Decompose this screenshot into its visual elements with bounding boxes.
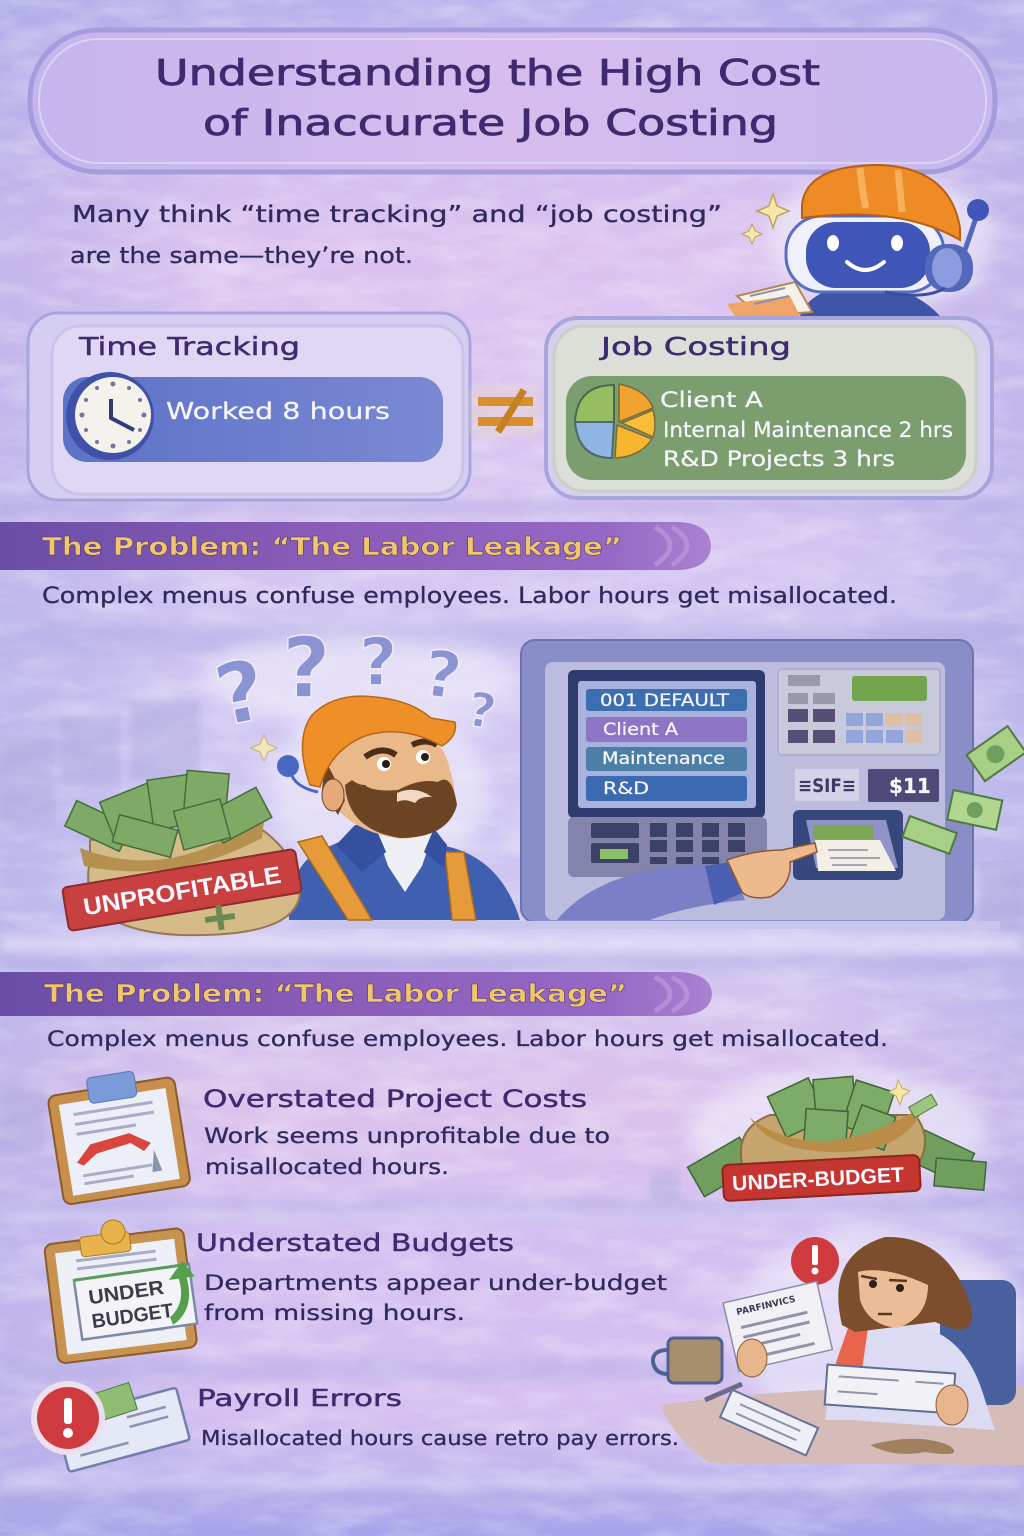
icon: pie chart (575, 384, 655, 458)
intro text (70, 202, 722, 269)
menu button: default: 001 DEFAULT (600, 691, 730, 710)
illustration: flying money (902, 726, 1024, 854)
hard hat (302, 696, 455, 787)
banner: the problem (second): The Problem: “The Labor Leakage” (44, 979, 627, 1008)
text: understated budgets: Understated Budgets (196, 1229, 514, 1257)
sparkle and note (889, 1080, 937, 1118)
banner: the problem (second) (0, 972, 712, 1016)
right control panel (778, 669, 940, 755)
icon: payroll alert (31, 1381, 190, 1472)
label: unprofitable: UNPROFITABLE (81, 862, 283, 921)
allocation text: Internal Maintenance 2 hrs (663, 418, 953, 442)
text: payroll errors: Payroll Errors (197, 1386, 402, 1412)
label: worked 8 hours: Worked 8 hours (166, 399, 390, 425)
label: under budget: BUDGET (90, 1300, 175, 1333)
menu button: maintenance: Maintenance (602, 749, 725, 768)
menu button: client a (586, 717, 747, 742)
body (825, 1322, 995, 1430)
text: understated budgets: Departments appear under-budget (204, 1271, 667, 1295)
pointing arm (557, 864, 745, 920)
illustration: money bag under-budget (688, 1076, 986, 1201)
icon: clipboard under budget (44, 1220, 201, 1364)
screen (568, 670, 765, 818)
allocation text: R&D Projects 3 hrs (663, 447, 895, 471)
chair (940, 1280, 1016, 1405)
floor (300, 921, 1000, 929)
menu button: client a: Client A (603, 720, 679, 739)
illustration: machine terminal (300, 640, 1000, 929)
question marks (207, 619, 500, 746)
blue pill: worked hours (63, 372, 443, 462)
price label (795, 769, 939, 802)
banner: the problem (first) (0, 522, 711, 570)
menu button: r&d: R&D (603, 779, 649, 798)
hair (838, 1237, 972, 1332)
head (322, 727, 457, 839)
card slot with receipt (793, 810, 903, 880)
menu button: r&d (586, 776, 747, 801)
green pill: allocations (566, 376, 966, 480)
question marks: ? (207, 640, 275, 746)
label: under budget: UNDER (87, 1277, 166, 1309)
banner: the problem (first): The Problem: “The Labor Leakage” (42, 532, 622, 561)
title: Understanding the High Cost (155, 53, 820, 94)
label: under-budget (722, 1155, 921, 1201)
paper held up (723, 1281, 832, 1371)
text: overstated project costs (203, 1085, 610, 1179)
icon: not equal (470, 385, 540, 437)
label: under-budget: UNDER-BUDGET (732, 1164, 905, 1196)
paper held up: PARFINVICS (736, 1295, 797, 1318)
allocation text: Client A (660, 388, 764, 412)
question marks: ? (463, 681, 500, 741)
notebook (720, 1390, 818, 1455)
icon: clipboard overstated (45, 1065, 191, 1205)
headset knob (277, 755, 318, 792)
title: of Inaccurate Job Costing (203, 103, 778, 144)
text: understated budgets: from missing hours. (204, 1301, 465, 1325)
face (858, 1270, 928, 1328)
title panel (30, 30, 995, 172)
alert bubble (791, 1237, 839, 1285)
text: payroll errors (197, 1386, 679, 1450)
label: under budget (73, 1260, 201, 1340)
check held (825, 1365, 955, 1413)
menu button: maintenance (586, 747, 747, 771)
heading: job costing: Job Costing (598, 332, 791, 361)
illustration: confused worker (251, 696, 817, 920)
panel: job costing (546, 318, 992, 498)
text: overstated project costs: Work seems unprofitable due to (204, 1124, 610, 1148)
question marks: ? (282, 619, 331, 717)
mug (653, 1338, 722, 1383)
illustration: woman at desk with invoice (653, 1237, 1024, 1465)
intro text: Many think “time tracking” and “job costing” (72, 202, 722, 228)
panel: time tracking (28, 313, 470, 500)
subheading: complex menus (second): Complex menus confuse employees. Labor hours get misallocated. (47, 1027, 888, 1052)
text: understated budgets (196, 1229, 667, 1325)
menu button: default (586, 689, 747, 711)
icon: robot in hard hat (727, 165, 989, 316)
question marks: ? (359, 624, 397, 701)
question marks: ? (419, 637, 466, 715)
price label: $11 (889, 774, 931, 798)
text: overstated project costs: Overstated Project Costs (203, 1085, 587, 1113)
title (155, 53, 820, 144)
text: payroll errors: Misallocated hours cause retro pay errors. (201, 1426, 679, 1450)
sparkle (251, 735, 277, 761)
keypad (568, 817, 767, 877)
allocation text (660, 388, 953, 471)
icon: clock (66, 372, 154, 460)
label: unprofitable (62, 849, 302, 931)
text: overstated project costs: misallocated hours. (205, 1155, 449, 1179)
intro text: are the same—they’re not. (70, 244, 413, 269)
subheading: complex menus (first): Complex menus confuse employees. Labor hours get misallocated. (42, 584, 897, 609)
heading: time tracking: Time Tracking (78, 332, 300, 361)
desk (660, 1385, 1024, 1465)
pen (705, 1384, 742, 1400)
illustration: money bag unprofitable (62, 770, 302, 935)
price label: ≡SIF≡ (798, 775, 856, 797)
